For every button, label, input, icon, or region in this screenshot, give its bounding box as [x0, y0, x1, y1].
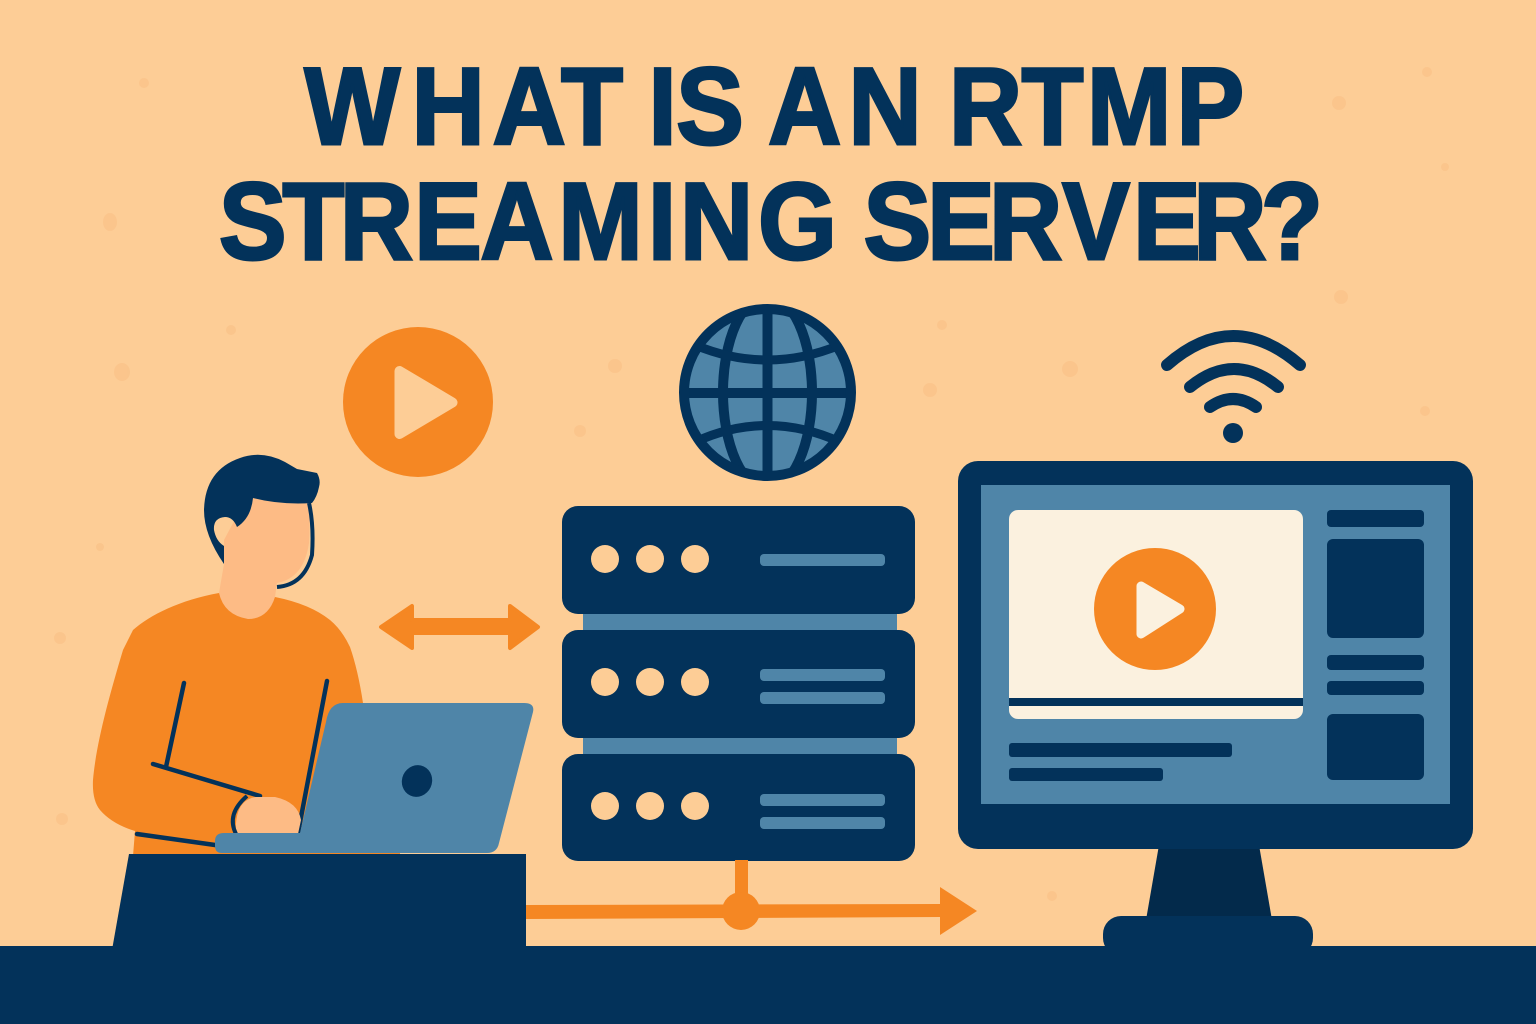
title: STREAMING SERVER?: [219, 160, 1323, 283]
icon: wifi signal: [1167, 336, 1300, 443]
hand: [233, 796, 301, 834]
server unit 2: [562, 630, 915, 738]
caption bars: [1009, 743, 1232, 781]
arrow: server to monitor: [526, 860, 977, 935]
monitor base: [1103, 916, 1313, 956]
title: [219, 45, 1323, 283]
server stack: [562, 506, 915, 861]
video player: [1009, 510, 1303, 719]
face outline: [277, 503, 313, 587]
monitor: [958, 461, 1473, 920]
neck and face: [219, 498, 310, 619]
floor: [0, 946, 1536, 1024]
server unit 3: [562, 754, 915, 861]
arm lines: [137, 681, 327, 845]
icon: orange play button: [343, 327, 493, 477]
desk: [112, 854, 526, 950]
title: WHAT IS AN RTMP: [305, 45, 1244, 168]
laptop: [215, 703, 533, 853]
icon: globe: [679, 304, 856, 481]
torso: [93, 593, 400, 856]
arrow: two-way person to server: [381, 606, 538, 648]
hair: [204, 455, 320, 564]
server unit 1: [562, 506, 915, 614]
sidebar: [1327, 510, 1424, 780]
person: [93, 455, 400, 856]
